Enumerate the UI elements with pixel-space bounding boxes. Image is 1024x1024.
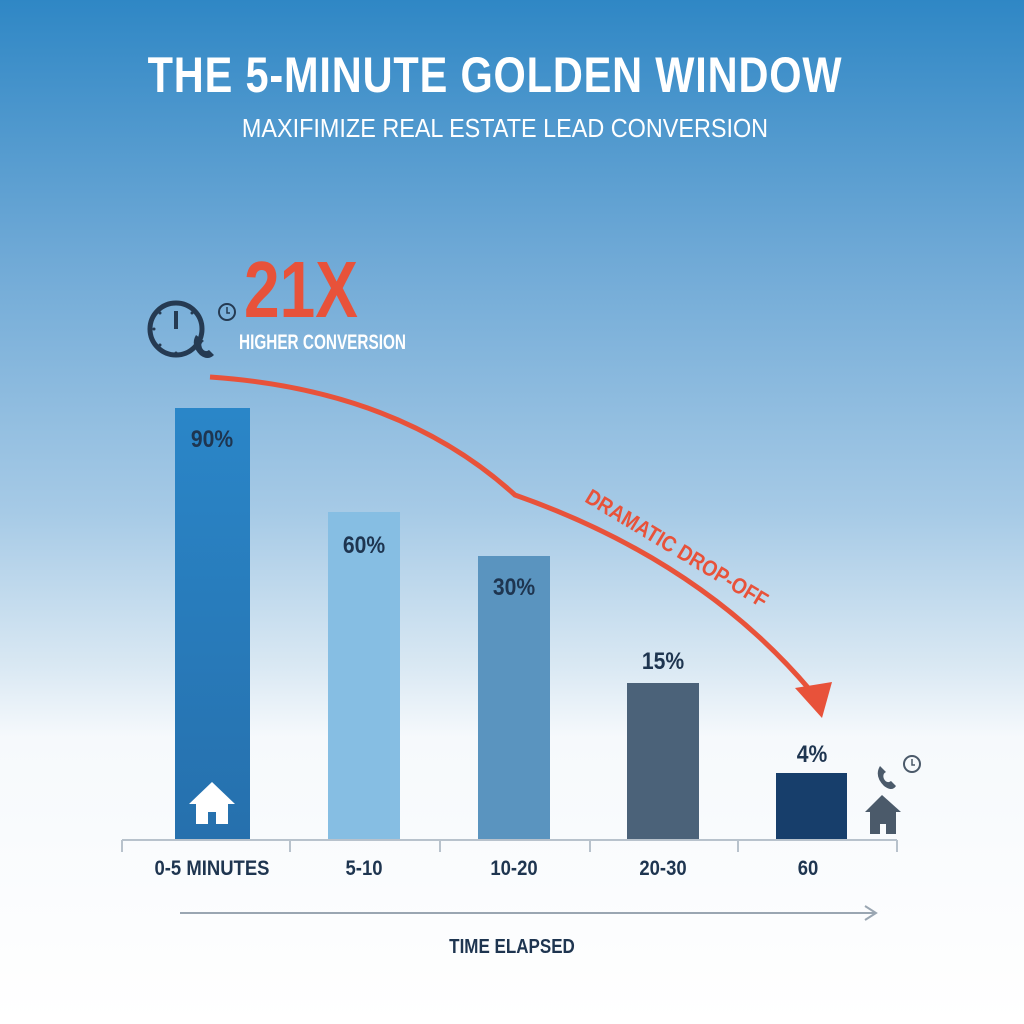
text: 60 [798, 857, 818, 880]
x labels: 0-5 MINUTES [154, 857, 270, 880]
axis [121, 839, 898, 921]
bar chart: 90% [191, 426, 233, 453]
bar chart [121, 408, 921, 921]
bar chart: 15% [642, 648, 684, 675]
text: 10-20 [490, 857, 538, 880]
callout: dramatic drop-off: DRAMATIC DROP-OFF [581, 484, 773, 613]
text: 5-10 [346, 857, 382, 880]
bar: 5-10 [328, 512, 400, 840]
bar chart: 60% [343, 532, 385, 559]
icon: phone house [865, 755, 921, 834]
axis title: TIME ELAPSED [449, 936, 575, 958]
title: THE 5-MINUTE GOLDEN WINDOW [148, 47, 842, 103]
icon: house [189, 782, 235, 824]
bar chart: 30% [493, 574, 535, 601]
bar chart: 4% [797, 741, 827, 768]
bar: 60 [776, 773, 847, 840]
text: 20-30 [639, 857, 687, 880]
stat: 21X: 21X [244, 245, 358, 334]
bar: 10-20 [478, 556, 550, 840]
bar: 20-30 [627, 683, 699, 840]
icon: clock with phone [148, 300, 236, 358]
bar: 0-5 [175, 408, 250, 840]
subtitle: MAXIFIMIZE REAL ESTATE LEAD CONVERSION [242, 113, 768, 143]
stat label: HIGHER CONVERSION [239, 331, 406, 354]
